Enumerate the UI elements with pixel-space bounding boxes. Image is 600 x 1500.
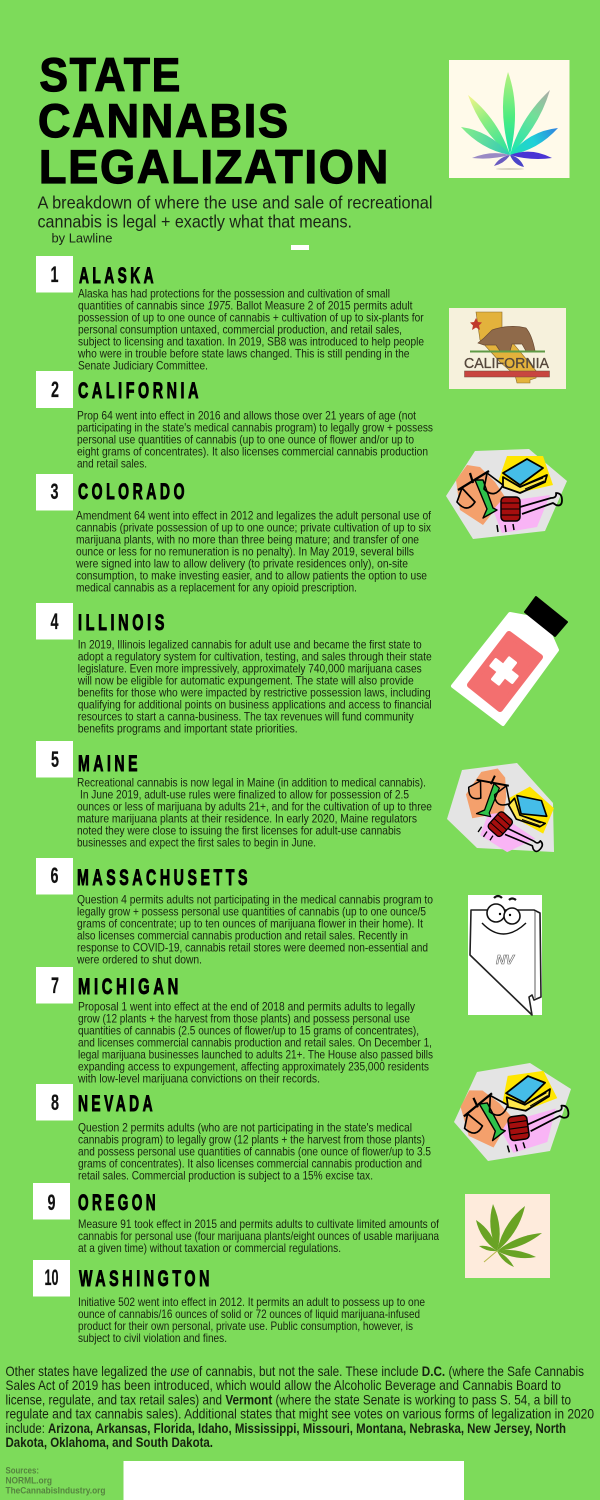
- body Colorado: marijuana plants, with no more than three being mature; and transfer of one: [76, 534, 419, 547]
- white footer box: [124, 1461, 464, 1500]
- image: California bear: [449, 308, 566, 389]
- body Washington: product for their own personal, private use. Public consumption, however, is: [78, 1320, 413, 1333]
- panel: Illinois: [36, 603, 432, 736]
- body Oregon: at a given time) without taxation or commercial regulations.: [78, 1242, 341, 1255]
- body Oregon: [78, 1218, 440, 1255]
- body Illinois: In 2019, Illinois legalized cannabis for adult use and became the first state to: [78, 639, 422, 652]
- body Colorado: medical cannabis as a replacement for any opioid prescription.: [76, 582, 357, 595]
- body Illinois: legislature. Even more impressively, approximately 740,000 marijuana cases: [78, 663, 422, 676]
- body Maine: mature marijuana plants at their residence. In early 2020, Maine regulators: [77, 813, 417, 826]
- heading Massachusetts: MASSACHUSETTS: [77, 865, 251, 890]
- panel: Maine: [36, 741, 432, 850]
- panel: Michigan: [36, 967, 433, 1086]
- body Michigan: quantities of cannabis (2.5 ounces of flower/up to 15 grams of concentrates),: [78, 1025, 419, 1038]
- panel: Massachusetts: [36, 858, 433, 967]
- body California: eight grams of concentrates). It also licenses commercial cannabis production: [77, 445, 428, 458]
- panel: Nevada: [36, 1084, 431, 1183]
- body California: [77, 409, 433, 470]
- image: Nevada cartoon: [468, 895, 542, 1015]
- body Nevada: retail sales. Commercial production is subject to a 15% excise tax.: [78, 1170, 373, 1183]
- image: law icons rotated: [447, 756, 567, 871]
- number badge 9: 9: [48, 1190, 56, 1215]
- heading Oregon: OREGON: [78, 1190, 159, 1215]
- image: green cannabis leaf: [465, 1194, 550, 1278]
- sources: NORML.org: [6, 1476, 52, 1486]
- body Colorado: consumption, to make investing easier, and to allow patients the option to use: [76, 570, 427, 583]
- body Alaska: quantities of cannabis since 1975. Ballot Measure 2 of 2015 permits adult: [78, 300, 413, 313]
- image: medicine bottle: [453, 597, 567, 724]
- number badge 5: [36, 741, 73, 778]
- body Maine: Recreational cannabis is now legal in Maine (in addition to medical cannabis).: [77, 777, 426, 790]
- heading Michigan: MICHIGAN: [78, 974, 182, 999]
- body Alaska: possession of up to one ounce of cannabis + cultivation of up to six-plants for: [78, 312, 424, 325]
- number badge 4: [36, 603, 73, 640]
- panel: California: [36, 371, 433, 470]
- subtitle: cannabis is legal + exactly what that means.: [38, 212, 352, 232]
- heading Colorado: COLORADO: [78, 479, 188, 504]
- body Illinois: qualifying for additional points on business applications and access to financial: [78, 699, 432, 712]
- number badge 2: 2: [51, 377, 59, 402]
- body Michigan: Proposal 1 went into effect at the end of 2018 and permits adults to legally: [78, 1001, 415, 1014]
- panel: Alaska: [36, 256, 424, 373]
- image: Nevada cartoon: NV: [496, 952, 515, 967]
- body Massachusetts: Question 4 permits adults not participating in the medical cannabis program to: [77, 894, 433, 907]
- subtitle: A breakdown of where the use and sale of recreational: [38, 192, 432, 212]
- body California: and retail sales.: [77, 457, 147, 470]
- body Colorado: Amendment 64 went into effect in 2012 and legalizes the adult personal use of: [76, 510, 432, 523]
- number badge 7: [36, 967, 73, 1004]
- body Illinois: benefits programs and important state priorities.: [78, 723, 298, 736]
- body Massachusetts: were ordered to shut down.: [76, 954, 202, 967]
- body Alaska: Alaska has had protections for the possession and cultivation of small: [78, 288, 390, 301]
- number badge 10: 10: [44, 1265, 58, 1290]
- sources: Sources:: [6, 1466, 39, 1476]
- number badge 6: 6: [50, 863, 58, 888]
- body Michigan: and licenses commercial cannabis production and retail sales. On December 1,: [78, 1037, 432, 1050]
- body Michigan: legal marijuana businesses launched to adults 21+. The House also passed bills: [78, 1049, 433, 1062]
- sources: TheCannabisIndustry.org: [6, 1486, 106, 1496]
- heading Alaska: ALASKA: [79, 263, 157, 288]
- title: [38, 48, 390, 193]
- body Maine: In June 2019, adult-use rules were finalized to allow for possession of 2.5: [80, 789, 409, 802]
- number badge 7: 7: [51, 973, 59, 998]
- body Oregon: Measure 91 took effect in 2015 and permits adults to cultivate limited amounts of: [78, 1218, 440, 1231]
- number badge 9: [33, 1183, 70, 1220]
- body Colorado: cannabis (private possession of up to one ounce; private cultivation of up to six: [76, 522, 431, 535]
- body California: Prop 64 went into effect in 2016 and allows those over 21 years of age (not: [77, 409, 417, 422]
- body Michigan: grow (12 plants + the harvest from those plants) and possess personal use: [78, 1013, 410, 1026]
- closing paragraph: Dakota, Oklahoma, and South Dakota.: [6, 1434, 213, 1450]
- body Washington: Initiative 502 went into effect in 2012. It permits an adult to possess up to one: [78, 1296, 425, 1309]
- body Maine: [77, 777, 432, 850]
- heading California: CALIFORNIA: [78, 378, 202, 403]
- heading Maine: MAINE: [78, 751, 141, 776]
- body Massachusetts: also licenses commercial cannabis production and retail sales. Recently in: [77, 930, 408, 943]
- body Colorado: ounce or less for no remuneration is no penalty). In May 2019, several bills: [76, 546, 414, 559]
- body Alaska: personal consumption untaxed, commercial production, and retail sales,: [78, 324, 402, 337]
- body Illinois: benefits for those who were impacted by restrictive possession laws, including: [78, 687, 431, 700]
- body Colorado: [75, 510, 432, 595]
- title: LEGALIZATION: [39, 140, 390, 193]
- number badge 8: 8: [51, 1090, 59, 1115]
- number badge 6: [36, 858, 73, 894]
- heading Illinois: ILLINOIS: [78, 610, 168, 635]
- body Massachusetts: response to COVID-19, cannabis retail stores were deemed non-essential and: [77, 942, 428, 955]
- image: California bear: CALIFORNIA: [464, 355, 549, 372]
- body Michigan: with low-level marijuana convictions on their records.: [77, 1073, 320, 1086]
- body Massachusetts: [76, 894, 433, 967]
- number badge 3: [36, 474, 73, 510]
- title: CANNABIS: [38, 94, 290, 147]
- heading Nevada: NEVADA: [78, 1091, 156, 1116]
- image: law icons: [446, 449, 567, 539]
- body Illinois: [77, 639, 432, 736]
- body Nevada: grams of concentrates). It also licenses commercial cannabis production and: [78, 1158, 422, 1171]
- body Alaska: [77, 288, 424, 373]
- panel: Oregon: [33, 1183, 440, 1255]
- body Oregon: cannabis for personal use (four marijuana plants/eight ounces of usable marijuana: [78, 1230, 439, 1243]
- number badge 1: [36, 256, 73, 292]
- body California: participating in the state's medical cannabis program) to legally grow + possess: [77, 421, 433, 434]
- white dash: [291, 245, 309, 250]
- number badge 1: 1: [50, 262, 58, 287]
- body Maine: businesses and expect the first sales to begin in June.: [77, 837, 316, 850]
- body Maine: ounces or less of marijuana by adults 21+, and for the cultivation of up to three: [77, 801, 432, 814]
- body Alaska: subject to licensing and taxation. In 2019, SB8 was introduced to help people: [78, 336, 424, 349]
- body Alaska: who were in trouble before state laws changed. This is still pending in the: [77, 348, 409, 361]
- body Alaska: Senate Judiciary Committee.: [78, 360, 208, 373]
- closing paragraph: Other states have legalized the use of cannabis, but not the sale. These include D.C. (where the Safe Cannabis: [6, 1363, 584, 1379]
- title: STATE: [40, 48, 182, 101]
- body Washington: subject to civil violation and fines.: [78, 1332, 227, 1345]
- body Washington: ounce of cannabis/16 ounces of solid or 72 ounces of liquid marijuana-infused: [78, 1308, 420, 1321]
- subtitle: [38, 192, 432, 232]
- body Nevada: [78, 1122, 431, 1183]
- body Illinois: adopt a regulatory system for cultivation, testing, and sales through their state: [78, 651, 432, 664]
- panel: Colorado: [36, 474, 432, 595]
- number badge 10: [33, 1260, 70, 1296]
- body Illinois: will now be eligible for automatic expungement. The state will also provide: [77, 675, 414, 688]
- sources: [6, 1466, 106, 1496]
- body Michigan: [77, 1001, 433, 1086]
- closing paragraph: [6, 1363, 594, 1450]
- body Michigan: expanding access to expungement, affecting approximately 235,000 residents: [78, 1061, 429, 1074]
- image: rainbow cannabis leaf: [449, 60, 570, 178]
- number badge 5: 5: [51, 747, 59, 772]
- heading Washington: WASHINGTON: [79, 1266, 213, 1291]
- byline: by Lawline: [52, 230, 112, 246]
- number badge 4: 4: [50, 609, 59, 634]
- number badge 8: [36, 1084, 73, 1120]
- body Maine: noted they were close to issuing the first licenses for adult-use cannabis: [77, 825, 401, 838]
- number badge 3: 3: [50, 479, 58, 504]
- body Nevada: cannabis program) to legally grow (12 plants + the harvest from those plants): [78, 1134, 425, 1147]
- body Nevada: Question 2 permits adults (who are not participating in the state's medical: [78, 1122, 412, 1135]
- body Washington: [78, 1296, 425, 1345]
- number badge 2: [36, 371, 73, 408]
- body Massachusetts: grams of concentrate; up to ten ounces of marijuana flower in their home). It: [77, 918, 424, 931]
- panel: Washington: [33, 1260, 425, 1345]
- image: law icons third: [454, 1063, 573, 1161]
- body Nevada: and possess personal use quantities of cannabis (one ounce of flower/up to 3.5: [78, 1146, 431, 1159]
- body Massachusetts: legally grow + possess personal use quantities of cannabis (up to one ounce/5: [77, 906, 426, 919]
- body California: personal use quantities of cannabis (up to one ounce of flower and/or up to: [77, 433, 414, 446]
- body Illinois: resources to start a canna-business. The tax revenues will fund community: [78, 711, 414, 724]
- body Colorado: were signed into law to allow delivery (to private residences only), on-site: [75, 558, 408, 571]
